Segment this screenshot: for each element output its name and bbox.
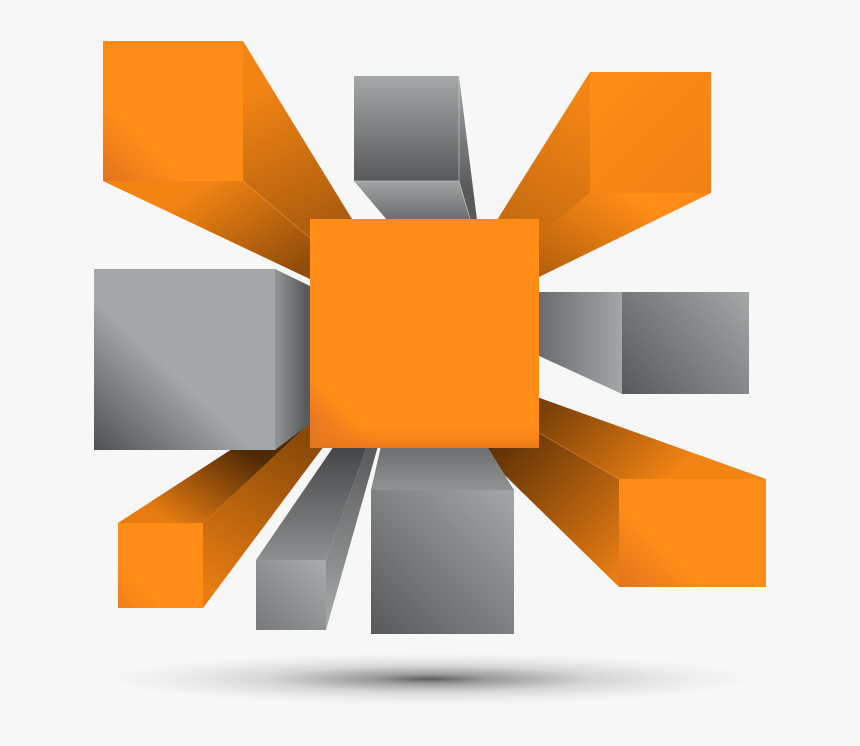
block: bottom-left orange bbox=[118, 421, 324, 608]
block: top-right orange bbox=[497, 72, 711, 278]
block: bottom grey bbox=[371, 446, 514, 634]
block: lower-right orange bbox=[476, 397, 766, 587]
block: top-left orange bbox=[103, 41, 352, 280]
block: left grey bbox=[94, 269, 312, 450]
block: top grey bbox=[354, 76, 477, 220]
ground shadow bbox=[105, 653, 755, 705]
block: bottom thin grey bbox=[256, 446, 378, 630]
central orange square bbox=[310, 219, 539, 448]
block: right grey bbox=[537, 292, 749, 394]
